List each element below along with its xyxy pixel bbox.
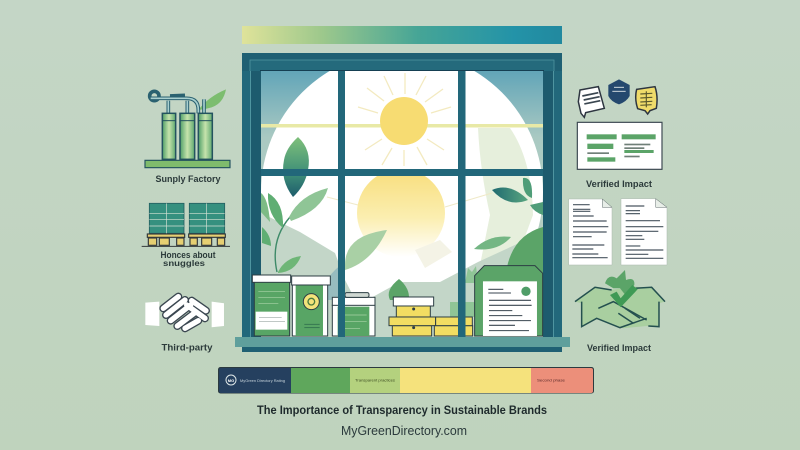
segment: navy: MG bbox=[228, 378, 234, 383]
icon: hands with check bbox=[575, 270, 665, 328]
segment: salmon bbox=[531, 368, 593, 393]
right column bbox=[569, 79, 667, 354]
box short bbox=[332, 293, 375, 336]
label: factory: Sunply Factory bbox=[156, 174, 221, 185]
label: verified impact top: Verified Impact bbox=[586, 179, 653, 190]
background sprigs bbox=[450, 266, 478, 317]
label: honest about struggles: Honces about bbox=[160, 250, 216, 260]
products on the sill bbox=[252, 266, 543, 336]
icon: factory bbox=[145, 89, 230, 168]
segment: navy bbox=[219, 368, 291, 393]
segment: yellow bbox=[400, 368, 531, 393]
horizon arcs bbox=[327, 193, 492, 207]
website: MyGreenDirectory.com bbox=[341, 423, 467, 438]
documents bbox=[569, 199, 667, 265]
window frame bbox=[242, 53, 562, 337]
label: verified impact bottom: Verified Impact bbox=[587, 343, 652, 354]
label: honest about struggles bbox=[160, 250, 216, 268]
segment: salmon: Second phase bbox=[537, 378, 565, 382]
side frame re-cover bbox=[242, 71, 562, 337]
icons: certificates bbox=[578, 79, 657, 117]
window illustration bbox=[235, 51, 570, 352]
pale right shape bbox=[478, 128, 533, 275]
upper leaf bbox=[283, 137, 309, 197]
small centre leaf bbox=[389, 279, 409, 300]
plant left bbox=[261, 188, 328, 273]
jar label bbox=[292, 276, 330, 336]
gray hill bbox=[261, 213, 517, 333]
sun with rays bbox=[358, 73, 451, 166]
label: honest about struggles: snuggles bbox=[163, 258, 205, 268]
segment: light green bbox=[350, 368, 400, 393]
spectrum bar bbox=[218, 367, 594, 394]
right leaves bbox=[474, 178, 543, 250]
icon: handshake bbox=[145, 297, 224, 328]
yellow boxes bbox=[389, 297, 473, 336]
folder document bbox=[475, 266, 543, 336]
segment: green bbox=[291, 368, 350, 393]
pale glint bbox=[415, 240, 452, 268]
segment: navy: MyGreen Directory Rating bbox=[240, 379, 285, 383]
jar green bbox=[252, 275, 291, 336]
icon: crates on pallets bbox=[142, 203, 230, 246]
window view bbox=[261, 51, 543, 337]
lower sun bbox=[357, 176, 445, 253]
mullions bbox=[261, 71, 543, 337]
big green circle right bbox=[508, 227, 543, 273]
segment: light green: Transparent practices bbox=[355, 378, 395, 382]
re-drawn mullions over boxes bbox=[338, 270, 466, 337]
gradient header bar bbox=[242, 26, 562, 44]
window sill bbox=[235, 337, 570, 352]
left column bbox=[142, 89, 230, 354]
centre leaf bbox=[345, 230, 387, 270]
report panel bbox=[577, 122, 662, 169]
title: The Importance of Transparency in Sustainable Brands bbox=[257, 403, 547, 417]
horizon line bbox=[261, 124, 543, 128]
label: third-party: Third-party bbox=[162, 342, 213, 354]
